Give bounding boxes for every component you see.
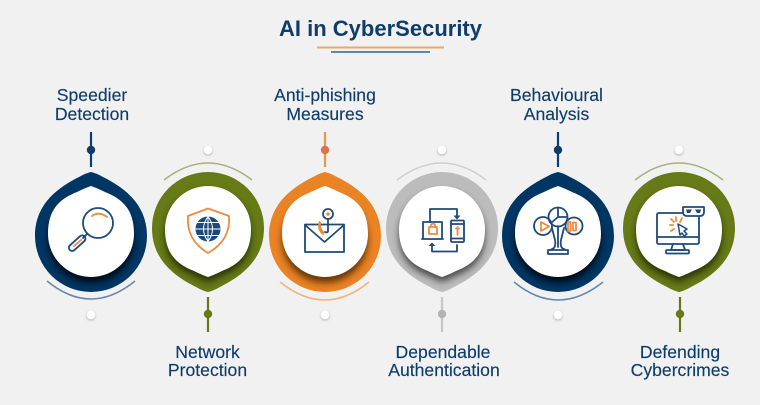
- panel: anti-phishing measures: [269, 132, 381, 319]
- icon: behaviour charts tree: [534, 208, 582, 254]
- label: Anti-phishing Measures: Anti-phishing: [274, 85, 376, 105]
- panel: dependable authentication: [386, 146, 498, 332]
- label: Defending Cybercrimes: Cybercrimes: [631, 360, 730, 380]
- label: Dependable Authentication: [388, 342, 500, 380]
- label: Network Protection: [168, 342, 247, 380]
- panel: defending cybercrimes: [623, 146, 735, 332]
- label: Speedier Detection: [55, 85, 129, 124]
- label: Defending Cybercrimes: Defending: [640, 342, 720, 362]
- label: Dependable Authentication: Authentication: [388, 360, 500, 380]
- icon: laptop and phone with lock: [422, 209, 464, 252]
- title: AI in CyberSecurity: [279, 16, 483, 41]
- icon: shield and globe: [188, 208, 229, 253]
- label: Behavioural Analysis: [510, 85, 603, 124]
- icon: magnifying glass: [68, 208, 113, 252]
- panel: behavioural analysis: [502, 132, 614, 319]
- label: Network Protection: Protection: [168, 360, 247, 380]
- label: Network Protection: Network: [175, 342, 240, 362]
- label: Speedier Detection: Speedier: [57, 85, 127, 105]
- label: Dependable Authentication: Dependable: [396, 342, 490, 362]
- icon: phishing envelope: [305, 209, 344, 252]
- label: Anti-phishing Measures: [274, 85, 376, 124]
- panel: network protection: [152, 146, 264, 332]
- label: Anti-phishing Measures: Measures: [286, 104, 364, 124]
- label: Defending Cybercrimes: [631, 342, 730, 380]
- label: Behavioural Analysis: Behavioural: [510, 85, 603, 105]
- label: Behavioural Analysis: Analysis: [524, 104, 589, 124]
- icon: monitor with cursor and mask: [657, 207, 704, 254]
- label: Speedier Detection: Detection: [55, 104, 129, 124]
- panel: speedier detection: [35, 132, 147, 319]
